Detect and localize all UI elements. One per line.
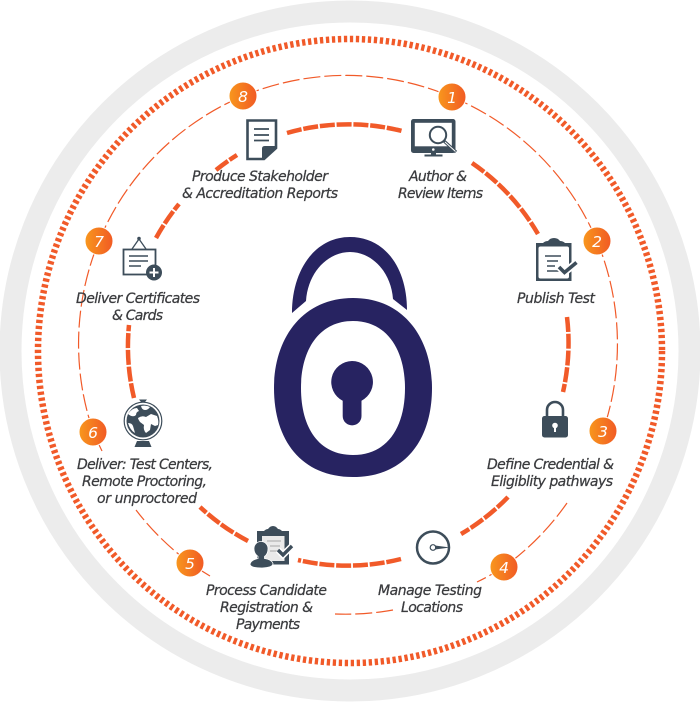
badge 3: 3 xyxy=(598,423,608,441)
padlock body xyxy=(274,298,432,477)
badge 7: 7 xyxy=(94,233,104,251)
step 5 label: Payments xyxy=(236,617,300,633)
step 3 label: Eligiblity pathways xyxy=(491,474,613,490)
step 5 label xyxy=(206,583,327,633)
icon: monitor with magnifier xyxy=(411,119,456,156)
keyhole xyxy=(331,361,373,425)
step 7 label: & Cards xyxy=(112,308,163,324)
step 8 label: & Accreditation Reports xyxy=(182,186,338,202)
step 5 label: Registration & xyxy=(220,600,313,616)
badge 6 xyxy=(79,418,107,446)
icon: report document xyxy=(248,120,277,160)
badge 2 xyxy=(583,227,611,255)
step 4 label: Manage Testing xyxy=(378,583,482,599)
step 7 label xyxy=(76,291,200,324)
icon: small padlock xyxy=(542,402,568,438)
icon: globe xyxy=(124,400,162,447)
step 1 label: Review Items xyxy=(398,186,483,202)
step 4 label xyxy=(378,583,482,616)
badge 1 xyxy=(438,83,466,111)
icon: clipboard with check xyxy=(536,238,576,281)
badge 6: 6 xyxy=(88,424,98,442)
step 3 label: Define Credential & xyxy=(487,457,614,473)
badge 2: 2 xyxy=(592,233,602,251)
step 6 label: or unproctored xyxy=(97,491,197,507)
badge 1: 1 xyxy=(447,89,457,107)
step 6 label: Deliver: Test Centers, xyxy=(77,457,213,473)
badge 8: 8 xyxy=(238,88,248,106)
icon: gauge xyxy=(417,532,450,564)
step 1 label xyxy=(398,169,483,202)
badge 4 xyxy=(490,553,518,581)
step 8 label xyxy=(182,169,338,202)
central padlock xyxy=(274,237,432,477)
icon: clipboard with candidate xyxy=(250,526,292,568)
icon: certificate board xyxy=(124,237,162,280)
step 8 label: Produce Stakeholder xyxy=(192,169,329,185)
dotted orange ring xyxy=(38,39,662,663)
step 3 label xyxy=(487,457,614,490)
badge 4: 4 xyxy=(499,559,509,577)
step 2 label: Publish Test xyxy=(517,291,596,307)
step 6 label xyxy=(77,457,213,507)
badge 3 xyxy=(589,417,617,445)
step 6 label: Remote Proctoring, xyxy=(82,474,207,490)
thick dashed inner ring xyxy=(128,124,569,566)
badge 7 xyxy=(85,227,113,255)
thin dashed ring xyxy=(79,75,617,614)
step 5 label: Process Candidate xyxy=(206,583,327,599)
badge 5: 5 xyxy=(185,555,195,573)
badge 5 xyxy=(176,549,204,577)
padlock shackle xyxy=(292,237,407,313)
step 4 label: Locations xyxy=(401,600,463,616)
step 7 label: Deliver Certificates xyxy=(76,291,200,307)
step 1 label: Author & xyxy=(408,169,467,185)
badge 8 xyxy=(229,82,257,110)
